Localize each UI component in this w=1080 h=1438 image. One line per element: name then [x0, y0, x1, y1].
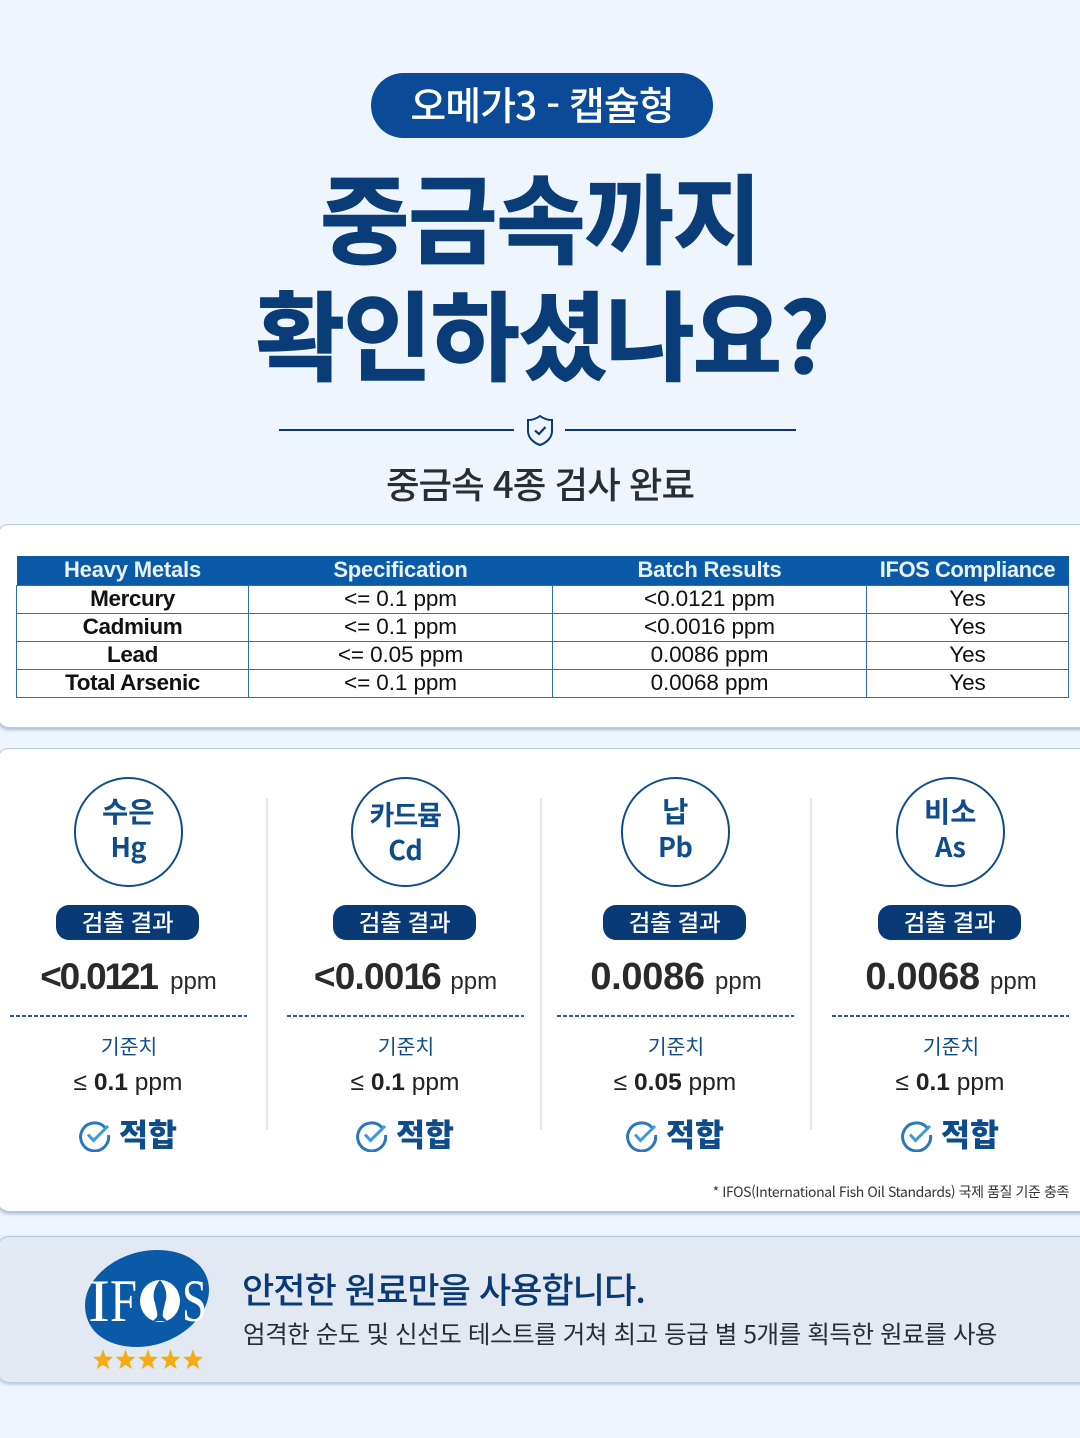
value: 0.0086 ppm [590, 956, 762, 998]
table: heavy metal results: Mercury [90, 586, 175, 611]
status: pass [79, 1110, 177, 1156]
pill: result [56, 905, 199, 940]
table: heavy metal results: <= 0.1 ppm [344, 614, 457, 639]
status: pass [356, 1110, 454, 1156]
divider [810, 798, 812, 1130]
logo: IFOS [85, 1250, 209, 1369]
logo lettering [88, 1268, 207, 1334]
icon: mercury circle [74, 777, 183, 886]
badge: product type: 오메가3 - 캡슐형 [410, 76, 674, 132]
footnote: * IFOS(International Fish Oil Standards) 국제 품질 기준 충족 [713, 1182, 1069, 1202]
column: mercury [10, 777, 247, 1156]
icon: lead circle: Pb [658, 826, 692, 865]
table: heavy metal results: 0.0068 ppm [651, 670, 768, 695]
logo egg shape [85, 1250, 209, 1347]
standard value: ≤ 0.05 ppm [614, 1069, 736, 1096]
icon: shield check [527, 414, 553, 446]
icon: mercury circle: 수은 [102, 790, 154, 831]
standard value: ≤ 0.1 ppm [896, 1069, 1004, 1096]
pill: result: 검출 결과 [904, 904, 995, 938]
pill: result: 검출 결과 [629, 904, 720, 938]
status: pass: 적합 [119, 1110, 177, 1156]
banner heading: 안전한 원료만을 사용합니다. [242, 1263, 645, 1314]
value: <0.0016 ppm [314, 956, 497, 997]
title line 1: 중금속까지 [320, 143, 761, 284]
column: cadmium [287, 777, 524, 1156]
icon: lead circle [620, 777, 730, 886]
table: heavy metal results: <= 0.1 ppm [344, 670, 457, 695]
table: heavy metal results: Specification [333, 557, 468, 582]
table: heavy metal results: <= 0.05 ppm [338, 642, 463, 667]
icon: arsenic circle: As [935, 826, 965, 865]
logo lettering: I [88, 1268, 110, 1334]
status: pass: 적합 [396, 1110, 454, 1156]
column: lead [557, 777, 794, 1156]
badge: product type [371, 73, 713, 138]
logo lettering: F [110, 1268, 137, 1334]
label: standard: 기준치 [648, 1030, 704, 1060]
icon: lead circle: 납 [662, 790, 688, 831]
title line 2: 확인하셨나요? [256, 260, 828, 401]
table: heavy metal results: Yes [949, 670, 986, 695]
table: heavy metal results: IFOS Compliance [880, 557, 1055, 582]
icon: cadmium circle: Cd [388, 829, 422, 868]
logo lettering: O [140, 1268, 180, 1334]
value: 0.0068 ppm [865, 956, 1037, 998]
icon: cadmium circle: 카드뮴 [369, 794, 441, 833]
table: heavy metal results: Cadmium [83, 614, 182, 639]
table: heavy metal results: Heavy Metals [64, 557, 201, 582]
pill: result: 검출 결과 [359, 904, 450, 938]
icon: arsenic circle: 비소 [924, 790, 976, 831]
column: arsenic [832, 777, 1069, 1156]
pill: result: 검출 결과 [82, 904, 173, 938]
divider with shield icon [279, 414, 796, 446]
table: heavy metal results: <0.0121 ppm [644, 586, 775, 611]
pill: result [333, 905, 476, 940]
table: heavy metal results: <0.0016 ppm [644, 614, 775, 639]
divider [266, 798, 268, 1130]
panel: IFOS banner [0, 1236, 1080, 1383]
subtitle: 중금속 4종 검사 완료 [386, 456, 694, 509]
table: heavy metal results: Lead [107, 642, 158, 667]
pill: result [878, 905, 1021, 940]
status: pass [626, 1110, 724, 1156]
standard value: ≤ 0.1 ppm [351, 1069, 459, 1096]
status: pass: 적합 [666, 1110, 724, 1156]
table: heavy metal results: 0.0086 ppm [651, 642, 768, 667]
table: heavy metal results: Yes [949, 614, 986, 639]
divider [540, 798, 542, 1130]
table: heavy metal results [16, 556, 1069, 698]
value: <0.0121 ppm [40, 956, 217, 997]
table: heavy metal results: Batch Results [637, 557, 782, 582]
table: heavy metal results: Yes [949, 586, 986, 611]
icon: cadmium circle [350, 777, 460, 886]
banner text: 엄격한 순도 및 신선도 테스트를 거쳐 최고 등급 별 5개를 획득한 원료를 사용 [243, 1316, 997, 1351]
icon: arsenic circle [896, 777, 1005, 886]
panel: results table [0, 524, 1080, 728]
icon: mercury circle: Hg [110, 826, 146, 865]
label: standard: 기준치 [101, 1030, 157, 1060]
standard value: ≤ 0.1 ppm [74, 1069, 182, 1096]
table: heavy metal results: Total Arsenic [65, 670, 200, 695]
table: heavy metal results: <= 0.1 ppm [344, 586, 457, 611]
label: standard: 기준치 [923, 1030, 979, 1060]
stars [93, 1349, 203, 1369]
status: pass [901, 1110, 999, 1156]
table: heavy metal results: Yes [949, 642, 986, 667]
status: pass: 적합 [941, 1110, 999, 1156]
pill: result [603, 905, 746, 940]
panel: metal cards [0, 748, 1080, 1212]
label: standard: 기준치 [378, 1030, 434, 1060]
